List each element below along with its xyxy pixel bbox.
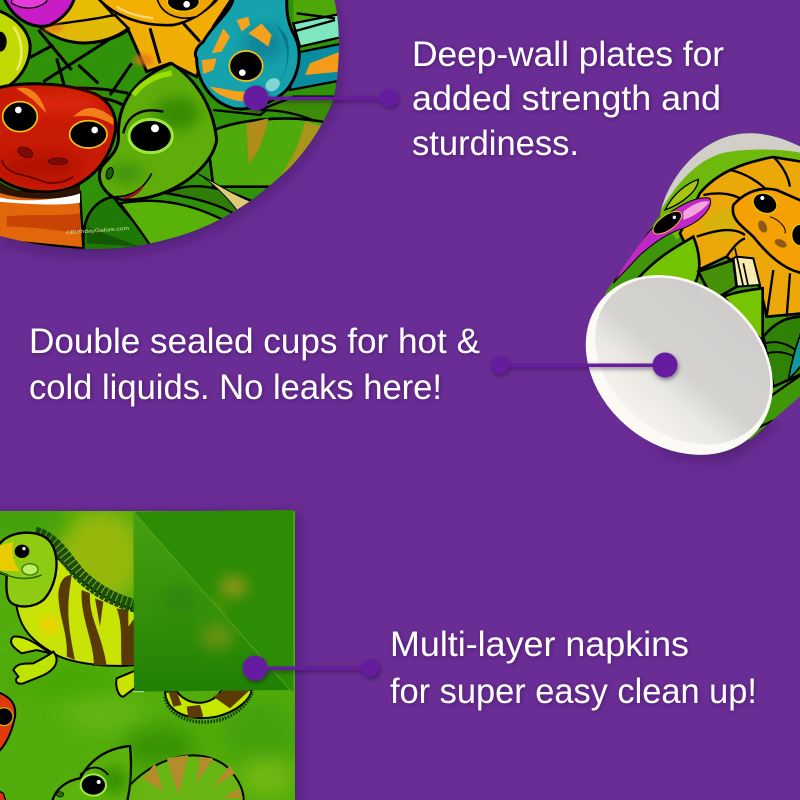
orange frog — [733, 189, 800, 273]
green lizard head — [99, 63, 217, 200]
text block: napkins: for super easy clean up! — [390, 672, 757, 711]
panel: cup photo — [586, 133, 800, 464]
text block: plates: added strength and — [412, 79, 721, 118]
orange frog — [97, 0, 217, 25]
text block: cups: Double sealed cups for hot & — [29, 322, 480, 361]
text block: napkins: Multi-layer napkins — [390, 625, 689, 664]
red frog on napkin — [0, 692, 15, 753]
lime frog — [0, 10, 30, 92]
text block: cups: cold liquids. No leaks here! — [29, 368, 442, 407]
text block: cups — [29, 322, 480, 407]
text block: plates — [412, 35, 724, 163]
magenta frog — [3, 0, 75, 26]
text block: plates: sturdiness. — [412, 124, 579, 163]
leaves — [637, 237, 699, 283]
leaves bottom — [83, 197, 157, 253]
panel: plate photo — [0, 0, 343, 257]
napkin fold — [133, 510, 293, 692]
callout: napkin connector — [242, 656, 379, 680]
pale claws — [723, 257, 760, 287]
callout: cup connector — [491, 352, 678, 378]
panel: napkin photo — [0, 503, 298, 800]
plate copyright: ©BirthdayGalore.com — [66, 225, 130, 236]
red frog — [0, 192, 83, 248]
teal chameleon — [293, 13, 343, 47]
cup body — [590, 130, 800, 443]
text block: plates: Deep-wall plates for — [412, 35, 724, 74]
tail — [165, 690, 252, 718]
cup base — [550, 238, 800, 492]
text block: napkins — [390, 625, 757, 711]
iguana spines — [35, 533, 138, 607]
pink eye — [613, 198, 711, 283]
callout: plate connector — [244, 86, 398, 110]
iguana on napkin — [0, 533, 253, 722]
sunburst — [680, 157, 800, 317]
lower right striped lizard body — [260, 97, 337, 125]
chameleon on napkin — [127, 755, 244, 800]
sun pattern behind frog — [42, 0, 233, 77]
